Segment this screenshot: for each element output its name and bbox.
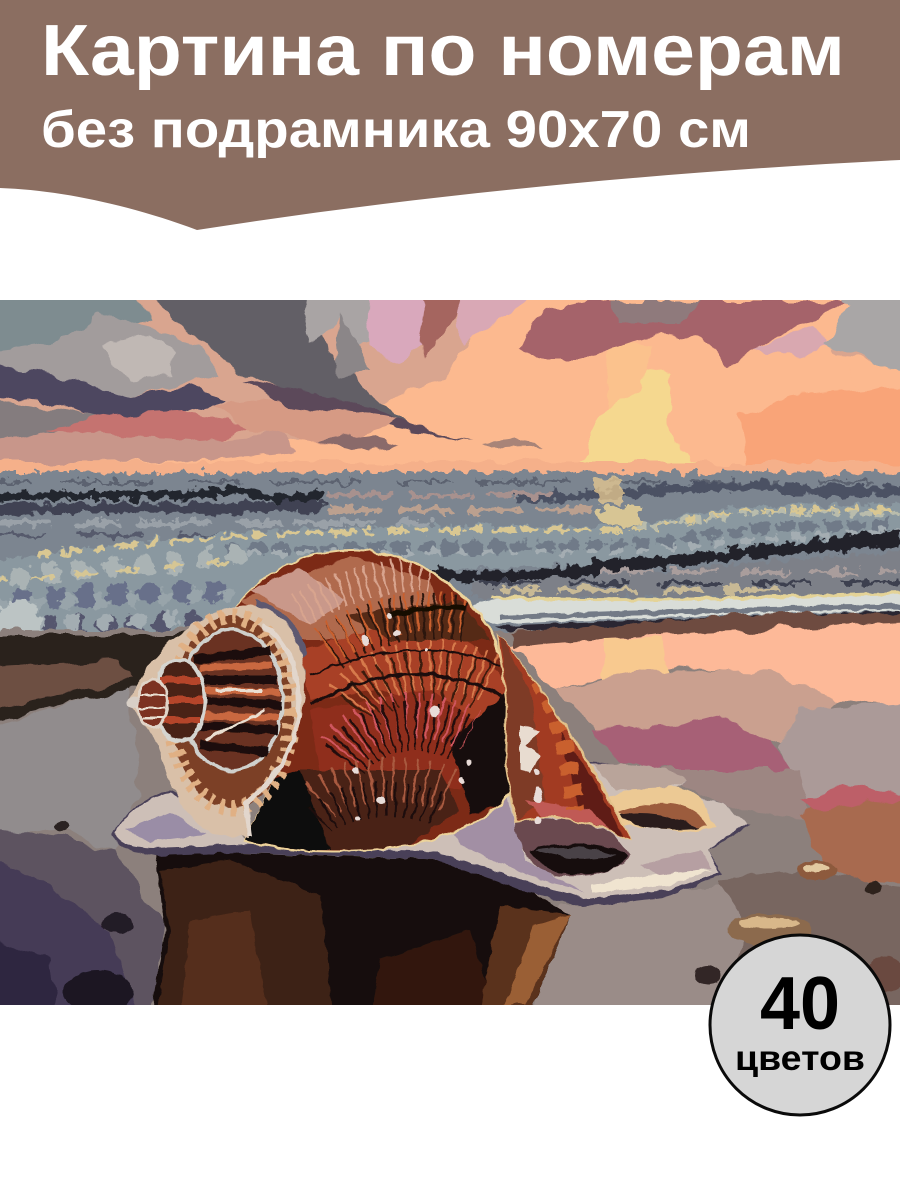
title: Картина по номерам (41, 11, 845, 91)
rear water (501, 554, 868, 583)
shell body (235, 548, 510, 853)
badge: 40 colours (710, 935, 890, 1115)
shell spire (128, 605, 305, 838)
shell mouth (515, 818, 630, 876)
pebbles (54, 821, 900, 1014)
badge label: цветов (735, 1039, 865, 1078)
painting: seashell on the beach at sunset (0, 280, 900, 1030)
shell lip (495, 630, 635, 845)
sky (0, 300, 900, 478)
shell reflection (152, 852, 571, 1005)
foam wave (0, 502, 900, 632)
subtitle: без подрамника 90х70 см (41, 101, 751, 159)
badge number: 40 (760, 961, 840, 1045)
dark trough line (430, 530, 900, 581)
wet sand (0, 610, 900, 1030)
outer flange ribs (172, 616, 292, 808)
right sky reflection (510, 622, 900, 706)
sea (0, 466, 900, 633)
shell ribs (300, 574, 495, 820)
snail foot (112, 762, 750, 907)
left sand and puddle (0, 635, 200, 725)
spire edge frill (246, 625, 299, 836)
header banner (0, 0, 900, 230)
shell flecks (353, 613, 473, 821)
foreshore foam roll (474, 592, 900, 632)
head and tentacle (605, 786, 716, 832)
